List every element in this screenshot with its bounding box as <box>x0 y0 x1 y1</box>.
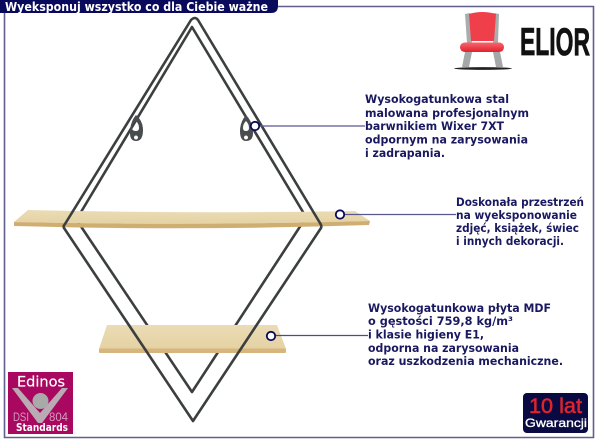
text block: display space: na wyeksponowanie <box>456 208 577 222</box>
badge: Edinos standards <box>8 372 73 434</box>
callout marker 2 <box>336 210 456 219</box>
badge: 10 year warranty <box>523 393 588 433</box>
wall bracket left <box>130 115 143 141</box>
wall bracket right <box>240 115 253 141</box>
text block: MDF board: odporna na zarysowania <box>368 341 519 355</box>
text block: display space: Doskonała przestrzeń <box>456 195 584 209</box>
badge: 10 year warranty: 10 lat <box>529 395 582 418</box>
text block: display space: i innych dekoracji. <box>456 234 564 248</box>
logo: ELIOR <box>454 12 590 70</box>
header bar <box>0 0 278 14</box>
text block: MDF board <box>368 301 563 368</box>
text block: steel: Wysokogatunkowa stal <box>365 92 509 106</box>
bottom shelf <box>99 325 286 353</box>
text block: display space: zdjęć, książek, świec <box>456 221 579 235</box>
text block: steel: malowana profesjonalnym <box>365 106 529 120</box>
text block: steel: i zadrapania. <box>365 146 445 160</box>
callout marker 1 <box>251 122 365 130</box>
text block: display space <box>456 195 584 248</box>
text block: MDF board: Wysokogatunkowa płyta MDF <box>368 301 551 315</box>
wire frame: front layer <box>64 18 321 421</box>
text block: MDF board: oraz uszkodzenia mechaniczne. <box>368 354 563 368</box>
badge: Edinos standards: DSI <box>13 412 29 424</box>
top shelf <box>14 210 370 228</box>
text block: MDF board: o gęstości 759,8 kg/m³ <box>368 314 513 328</box>
badge: Edinos standards: Standards <box>16 422 68 434</box>
text block: MDF board: i klasie higieny E1, <box>368 328 484 342</box>
callout marker 3 <box>267 332 368 340</box>
badge: Edinos standards: 804 <box>49 412 69 424</box>
text block: steel <box>365 92 529 160</box>
text block: steel: odpornym na zarysowania <box>365 132 528 146</box>
text block: steel: barwnikiem Wixer 7XT <box>365 119 504 133</box>
wire frame: back layer <box>78 27 303 392</box>
badge: Edinos standards: Edinos <box>17 374 65 390</box>
wall shelf illustration <box>14 18 370 421</box>
icon: chair <box>454 12 512 70</box>
badge: 10 year warranty: Gwarancji <box>525 416 587 430</box>
header title: Wyeksponuj wszystko co dla Ciebie ważne <box>5 0 268 14</box>
